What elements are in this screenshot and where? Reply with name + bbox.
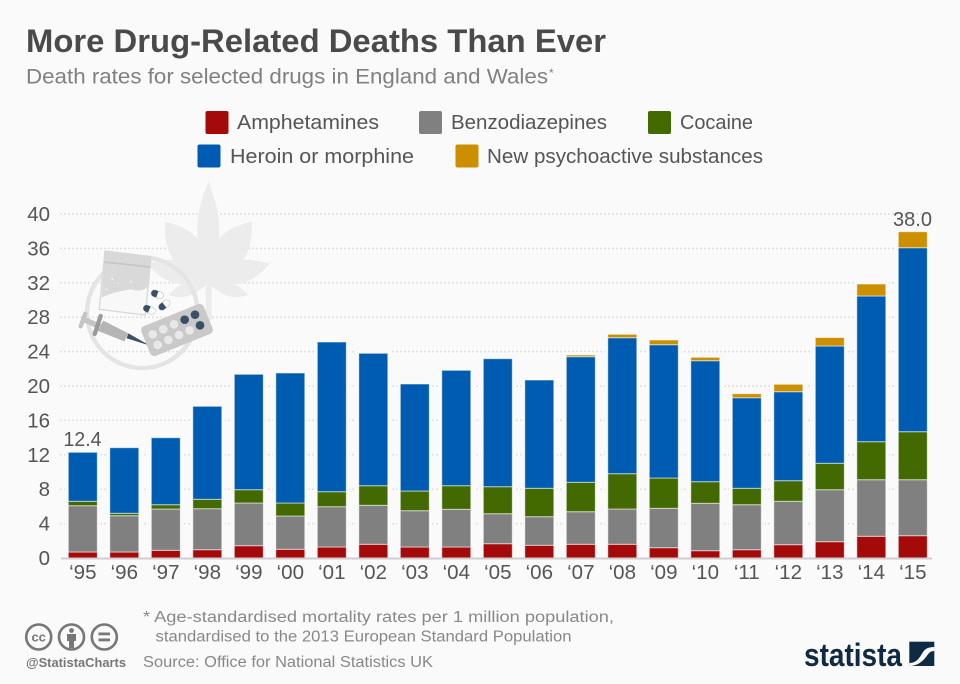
icon: drug illustration with cannabis leaf, bag, pills and syringe — [81, 182, 270, 368]
bar: 2008 — [608, 334, 637, 558]
bar: 2005 — [483, 359, 512, 558]
value label: 1995: 12.4 — [64, 428, 102, 451]
icon: powder bag — [99, 251, 151, 315]
logo: statista: statista — [804, 637, 902, 673]
legend — [198, 111, 763, 168]
bar: 2007 — [566, 355, 595, 558]
subtitle: Death rates for selected drugs in England and Wales — [26, 64, 548, 88]
bar: 2001 — [317, 342, 346, 558]
bar: 1999 — [234, 374, 263, 558]
y axis labels: 36 — [27, 237, 50, 260]
y axis labels: 12 — [27, 444, 50, 467]
x axis labels: ‘97 — [152, 561, 179, 584]
bar: 1997 — [151, 438, 180, 558]
bar: 2012 — [774, 384, 803, 558]
x axis labels: ‘99 — [235, 561, 262, 584]
bar: 2009 — [649, 340, 678, 558]
legend item: Benzodiazepines: Benzodiazepines — [451, 111, 607, 134]
x axis labels: ‘14 — [858, 561, 885, 584]
x axis labels: ‘01 — [318, 561, 345, 584]
legend item: Amphetamines: Amphetamines — [237, 111, 379, 134]
y axis labels: 32 — [27, 272, 50, 295]
stacked bar chart — [68, 232, 927, 558]
legend item: New psychoactive substances: New psychoactive substances — [487, 145, 763, 168]
y axis labels: 28 — [27, 306, 50, 329]
x axis labels: ‘95 — [69, 561, 96, 584]
x axis labels: ‘04 — [443, 561, 470, 584]
x axis labels: ‘15 — [899, 561, 926, 584]
icon: capsules — [142, 289, 171, 315]
x axis labels: ‘96 — [111, 561, 138, 584]
x axis labels: ‘10 — [692, 561, 719, 584]
x axis labels: ‘05 — [484, 561, 511, 584]
bar: 2015 — [898, 232, 927, 558]
x axis labels — [69, 561, 926, 584]
legend item: Cocaine: Cocaine — [680, 111, 753, 134]
y axis labels: 24 — [27, 341, 50, 364]
bar: 2010 — [691, 357, 720, 558]
x axis baseline — [61, 558, 932, 560]
x axis labels: ‘07 — [567, 561, 594, 584]
icon: creative commons licence: cc — [31, 630, 46, 644]
x axis labels: ‘12 — [775, 561, 802, 584]
bar: 2014 — [857, 284, 886, 558]
bar: 2000 — [276, 373, 305, 558]
x axis labels: ‘09 — [650, 561, 677, 584]
bar: 2006 — [525, 380, 554, 558]
y axis labels: 20 — [27, 375, 50, 398]
footnote — [143, 609, 614, 646]
x axis labels: ‘98 — [194, 561, 221, 584]
x axis labels: ‘03 — [401, 561, 428, 584]
x axis labels: ‘13 — [816, 561, 843, 584]
subtitle: * — [549, 66, 554, 80]
icon: syringe — [81, 314, 150, 346]
y axis labels: 40 — [27, 203, 50, 226]
y axis labels: 0 — [39, 547, 50, 570]
bar: 2002 — [359, 353, 388, 558]
bar: 2011 — [732, 394, 761, 558]
icon: ring — [87, 257, 198, 368]
x axis labels: ‘06 — [526, 561, 553, 584]
bar: 2004 — [442, 370, 471, 558]
footnote: * Age-standardised mortality rates per 1 million population, — [143, 609, 614, 626]
y axis labels — [27, 203, 50, 570]
bar: 2013 — [815, 338, 844, 558]
icon: creative commons licence — [26, 624, 117, 650]
icon: cannabis leaf — [147, 182, 270, 320]
icon: blister pack — [140, 303, 214, 357]
bar: 1996 — [110, 448, 139, 558]
y axis labels: 4 — [39, 513, 50, 536]
y axis labels: 8 — [39, 478, 50, 501]
handle: @StatistaCharts — [26, 656, 126, 670]
x axis labels: ‘02 — [360, 561, 387, 584]
legend item: Heroin or morphine: Heroin or morphine — [230, 145, 414, 168]
footnote: standardised to the 2013 European Standard Population — [156, 628, 572, 646]
x axis labels: ‘00 — [277, 561, 304, 584]
legend item: Cocaine — [648, 111, 753, 134]
x axis labels: ‘11 — [734, 561, 760, 584]
value label: 2015: 38.0 — [893, 208, 932, 231]
bar: 1998 — [193, 406, 222, 558]
title: More Drug-Related Deaths Than Ever — [26, 23, 606, 59]
bar: 2003 — [400, 384, 429, 558]
x axis labels: ‘08 — [609, 561, 636, 584]
source: Source: Office for National Statistics UK — [143, 654, 434, 671]
bar: 1995 — [68, 452, 97, 558]
y axis labels: 16 — [27, 409, 50, 432]
